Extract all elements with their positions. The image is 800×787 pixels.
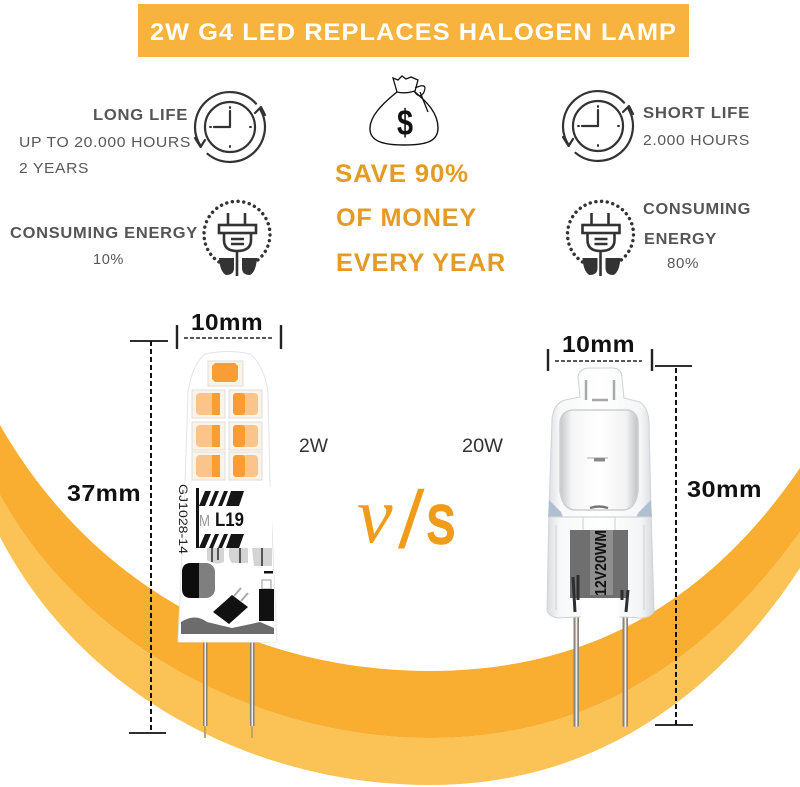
- LED width dimension: 10mm: [191, 309, 263, 335]
- icon: plug left: [204, 201, 270, 276]
- right text: short life: [643, 105, 750, 149]
- driver label: M: [199, 513, 210, 530]
- title banner: 2W G4 LED REPLACES HALOGEN LAMP: [150, 19, 677, 46]
- pins: [574, 612, 628, 727]
- left text: long life: 2 YEARS: [19, 160, 89, 177]
- left text: consuming energy: 10%: [93, 251, 124, 268]
- glass envelope: [547, 368, 654, 618]
- LED bulb: [176, 352, 277, 738]
- LED width dimension: [177, 309, 281, 349]
- title banner: [138, 4, 689, 57]
- center savings text: EVERY YEAR: [336, 249, 506, 277]
- LED height dimension: 37mm: [67, 480, 141, 506]
- right text: consuming energy: [643, 201, 751, 272]
- wattage label 20W: 20W: [462, 436, 503, 457]
- left text: long life: LONG LIFE: [93, 107, 188, 124]
- pins: [203, 640, 254, 738]
- icon: plug right: [568, 201, 634, 276]
- icon: clock left: [195, 92, 265, 162]
- left text: consuming energy: CONSUMING ENERGY: [10, 225, 198, 242]
- right text: consuming energy: 80%: [667, 255, 699, 272]
- dark seal with print: 12V20WM: [593, 530, 610, 596]
- halogen bulb: [547, 368, 654, 727]
- circuit components: [181, 548, 274, 634]
- wattage label 2W: 2W: [299, 436, 328, 457]
- icon: money bag: [370, 76, 438, 145]
- right text: short life: SHORT LIFE: [643, 105, 750, 122]
- left text: consuming energy: [10, 225, 198, 268]
- halogen height dimension: 30mm: [687, 476, 762, 502]
- right text: short life: 2.000 HOURS: [643, 132, 750, 149]
- LED height dimension: [67, 341, 168, 733]
- icon: clock right: [563, 91, 633, 161]
- blue shade edges: [548, 500, 652, 517]
- bulb cavity: [560, 410, 638, 510]
- left text: long life: UP TO 20.000 HOURS: [19, 134, 191, 151]
- driver label: L19: [215, 510, 244, 531]
- left text: long life: [19, 107, 191, 177]
- halogen height dimension: [655, 366, 762, 725]
- center savings text: [335, 160, 506, 277]
- versus text: v: [357, 472, 393, 560]
- driver label: [196, 487, 272, 548]
- versus text: /: [400, 471, 422, 563]
- dark seal with print: [570, 530, 628, 618]
- LED chips: [192, 361, 262, 480]
- halogen width dimension: [548, 331, 652, 371]
- center savings text: SAVE 90%: [335, 160, 469, 188]
- orange curved band background: [0, 425, 800, 785]
- icon: money bag: $: [397, 102, 413, 143]
- right text: consuming energy: ENERGY: [644, 231, 717, 248]
- versus text: s: [427, 481, 455, 558]
- nipple and filament: [586, 380, 614, 400]
- center savings text: OF MONEY: [336, 204, 477, 232]
- right text: consuming energy: CONSUMING: [643, 201, 751, 218]
- silicone body: [178, 352, 277, 642]
- halogen width dimension: 10mm: [562, 331, 635, 357]
- printed code: GJ1028-14: [176, 484, 190, 554]
- versus text: [357, 471, 455, 563]
